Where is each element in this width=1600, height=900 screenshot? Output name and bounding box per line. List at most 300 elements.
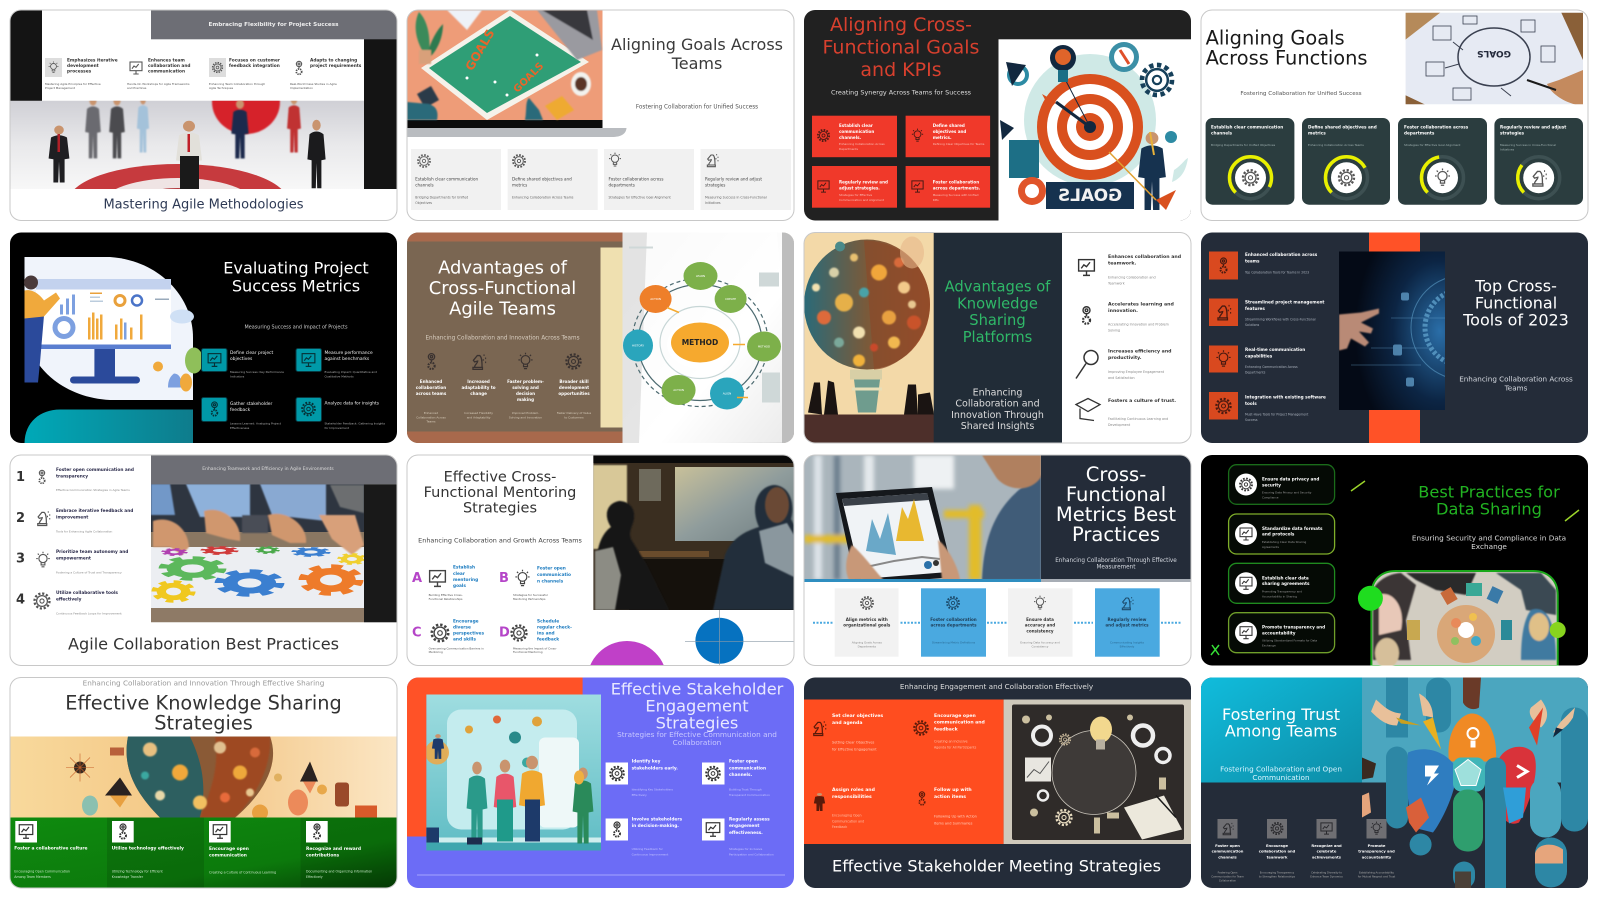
item: define objectives: objectives xyxy=(230,356,253,362)
item: follow up xyxy=(919,786,977,826)
item D: ins and xyxy=(537,630,555,636)
title: Strategies xyxy=(463,500,537,516)
item D: Measuring the Impact of Cross- xyxy=(513,646,557,650)
subtitle: Exchange xyxy=(1471,542,1507,550)
item: data privacy: Ensuring Data Privacy and Security xyxy=(1262,491,1312,495)
item B: n channels xyxy=(537,578,564,584)
title: Metrics Best xyxy=(1056,502,1176,526)
teal header block xyxy=(1201,678,1362,782)
item: increases efficiency: Improving Employee Engagement xyxy=(1108,370,1165,374)
column: reward contributions: Recognize and reward xyxy=(306,846,361,852)
item: promote transparency: Utilizing Standardized Formats for Data xyxy=(1262,639,1317,643)
item: benchmarks: Evaluating Impact: Quantitative and xyxy=(324,370,377,374)
panel: Cross-Functional Metrics Best Practices slide xyxy=(804,455,1191,666)
subtitle: Fostering Collaboration for Unified Success xyxy=(1240,91,1362,97)
numeral 4: 4 xyxy=(16,592,25,608)
item 3: Prioritize team autonomy and xyxy=(56,548,128,554)
title: Teams xyxy=(671,54,722,72)
card: define shared objectives: Define shared objectives and xyxy=(512,176,572,181)
title: Cross-Functional xyxy=(429,278,576,298)
item: open communication xyxy=(702,758,770,797)
item: identify stakeholders: Identifying Key Stakeholders xyxy=(632,788,673,792)
item 2: improvement xyxy=(56,514,88,520)
panel: Mastering Agile Methodologies slide xyxy=(10,10,396,212)
item: define objectives: Define clear project xyxy=(230,350,273,356)
item: fosters trust: Development xyxy=(1108,423,1131,427)
top subtitle: Enhancing Engagement and Collaboration Effectively xyxy=(900,682,1094,691)
photo: digital touch xyxy=(1339,252,1445,410)
item A: Functional Relationships xyxy=(429,597,463,601)
card: review gauge xyxy=(1494,118,1583,207)
item A: goals xyxy=(453,582,466,588)
item 2 xyxy=(38,508,133,534)
card: establish clear communication: channels xyxy=(415,182,434,187)
title: Tools of 2023 xyxy=(1462,310,1569,329)
title: Functional xyxy=(1475,293,1557,312)
item: assign roles: Encouraging Open xyxy=(832,814,862,818)
diagram: method cycle: HISTORY xyxy=(632,344,644,348)
subtitle: Communication xyxy=(1252,772,1310,782)
item: open communication: Foster open xyxy=(729,758,758,764)
band heading: Embracing Flexibility for Project Success xyxy=(209,22,339,28)
item: open communication: feedback xyxy=(934,726,959,732)
item: assign roles xyxy=(814,786,875,829)
card: align metrics: organizational goals xyxy=(843,622,891,627)
gray band xyxy=(151,455,397,484)
column: teamwork: teamwork xyxy=(1267,855,1288,859)
item 4 text: Adapts to changing xyxy=(310,57,357,63)
subtitle: Enhancing Collaboration and Growth Across Teams xyxy=(418,536,582,544)
subtitle: Strategies for Effective Communication and xyxy=(617,730,777,738)
title: Practices xyxy=(1072,522,1160,546)
card: communication gauge xyxy=(1206,118,1294,207)
card: shared objectives: metrics. xyxy=(933,134,952,140)
item: enhances collaboration: teamwork. xyxy=(1108,260,1136,266)
title: Mastering Agile Methodologies xyxy=(103,198,304,212)
card: foster collaboration xyxy=(906,166,990,208)
column: skill development: Faster Delivery of Value xyxy=(557,411,591,415)
column: skill development xyxy=(557,354,591,419)
card: objectives gauge: Enhancing Collaboration Across Teams xyxy=(1308,143,1364,147)
card: shared objectives: Defining Clear Objectives for Teams xyxy=(933,142,985,146)
card: ensure accuracy: Ensuring Data Accuracy and xyxy=(1020,640,1060,644)
card: objectives gauge: metrics xyxy=(1308,130,1326,135)
item: fosters trust xyxy=(1076,398,1176,427)
item: involve stakeholders: Involve stakeholders xyxy=(632,816,682,822)
item: benchmarks: Measure performance xyxy=(324,350,373,356)
card: establish clear communication: Bridging Departments for Unified xyxy=(415,196,468,200)
column: accountability: transparency and xyxy=(1358,850,1395,854)
card: foster collaboration: Measuring Success with Unified xyxy=(933,193,979,197)
connector dots xyxy=(813,622,1181,624)
item D xyxy=(499,618,572,654)
column: collaboration: collaboration xyxy=(416,384,446,390)
illustration: knowledge heart xyxy=(10,736,396,818)
title: Strategies xyxy=(154,711,253,734)
top accent strip xyxy=(407,232,622,242)
icon: gear xyxy=(209,58,226,77)
column: collaboration: Enhanced xyxy=(424,411,438,415)
title: Advantages of xyxy=(438,257,568,278)
diagram: method cycle: METHOD xyxy=(758,344,770,348)
item sub text row: Project Management xyxy=(45,86,76,90)
title: Aligning Goals Across xyxy=(611,34,783,54)
column: adaptability: and Adaptability xyxy=(467,415,491,419)
column: open communication: Encourage open xyxy=(209,846,249,852)
item C: and skills xyxy=(453,636,476,642)
item 4: Continuous Feedback Loops for Improvement xyxy=(56,611,122,615)
item: standardize formats: Agreements xyxy=(1262,545,1280,549)
illustration: hands and pills xyxy=(1362,678,1588,888)
card: review metrics xyxy=(1095,588,1160,657)
panel: Effective Stakeholder Engagement Strategies slide xyxy=(407,678,794,888)
item: open communication: Creating an Inclusive xyxy=(934,740,968,744)
item sub text row: Hands-On Workshops for Agile Frameworks xyxy=(127,82,190,86)
card: review strategies: Strategies for Effective xyxy=(839,193,872,197)
title: Success Metrics xyxy=(232,276,360,295)
orange strip bottom xyxy=(1369,410,1420,443)
black right block xyxy=(364,484,397,622)
card: align metrics: Align metrics with xyxy=(846,616,888,622)
column: collaborative culture: Foster a collaborative culture xyxy=(14,846,87,852)
item 4 xyxy=(34,590,122,615)
card: review metrics: Communicating Insights xyxy=(1110,640,1145,644)
item: integration: Success xyxy=(1245,418,1258,422)
panel: Effective Knowledge Sharing Strategies slide xyxy=(10,678,398,888)
card: regularly review xyxy=(700,149,791,210)
black right bar xyxy=(364,39,397,189)
item: promote transparency xyxy=(1229,613,1335,653)
column: achievements: celebrate xyxy=(1317,850,1337,854)
item: stakeholder feedback: Gather stakeholder xyxy=(230,400,272,406)
icon: strategy xyxy=(296,61,302,74)
item: streamlined project management: features xyxy=(1245,306,1265,310)
subtitle: Enhancing Collaboration Across xyxy=(1459,374,1573,383)
item A: mentoring xyxy=(453,576,478,582)
item 2 text: communication xyxy=(148,68,185,74)
item B: B xyxy=(499,571,509,586)
panel: Advantages of Knowledge Sharing Platforms slide xyxy=(804,232,1191,444)
decor: blue circle xyxy=(695,618,743,664)
card: shared objectives: objectives and xyxy=(933,128,966,134)
card: communication gauge: Bridging Departments for Unified Objectives xyxy=(1211,143,1276,147)
item: accelerates learning: innovation. xyxy=(1108,308,1138,314)
item: open communication: Encourage open xyxy=(934,712,976,718)
column: problem solving: Faster problem- xyxy=(507,378,544,384)
item B: communicatio xyxy=(537,571,571,577)
card: review strategies xyxy=(812,166,897,208)
item 3 text: feedback integration xyxy=(229,63,280,69)
item: sharing agreements xyxy=(1229,563,1335,603)
card: review strategies: adjust strategies. xyxy=(839,185,880,190)
column: achievements: achievements xyxy=(1312,855,1342,859)
bottom accent strip xyxy=(407,432,622,444)
card: define shared objectives: Enhancing Collaboration Across Teams xyxy=(512,196,574,200)
column: accountability: Promote xyxy=(1368,844,1386,848)
diagram: method cycle: ACTION xyxy=(673,388,684,392)
item: clear objectives: for Effective Engagement xyxy=(832,748,877,752)
column: collaboration: across teams xyxy=(416,390,447,396)
item: assess engagement: Strategies for Inclusive xyxy=(729,847,763,851)
diagram: method cycle: METHOD xyxy=(682,338,718,347)
column: adaptability: Increased Flexibility xyxy=(464,411,493,415)
column: open channels: Foster open xyxy=(1215,844,1240,848)
column: teamwork: Encouraging Transparency xyxy=(1260,870,1295,874)
column: achievements: Celebrating Diversity to xyxy=(1311,870,1342,874)
column: collaborative culture: Encouraging Open Communication xyxy=(14,870,70,874)
card: regularly review: Initiatives xyxy=(705,201,721,205)
card: foster collaboration: across departments xyxy=(930,622,977,627)
item: data privacy xyxy=(1229,465,1335,504)
card: foster collaboration: Foster collaboration across xyxy=(608,176,664,181)
subtitle: Collaboration and xyxy=(955,398,1040,409)
item: assess engagement: effectiveness. xyxy=(729,829,763,835)
item A: Building Effective Cross- xyxy=(429,593,463,597)
item: open communication: channels. xyxy=(729,772,753,778)
column: open channels: channels xyxy=(1218,855,1238,859)
item: analyze data: Stakeholder Feedback: Gathering Insights xyxy=(324,422,385,426)
title: Sharing xyxy=(969,312,1026,329)
item A: Establish xyxy=(453,564,475,570)
item: enhanced collaboration: teams xyxy=(1245,258,1260,263)
column: adaptability: adaptability to xyxy=(462,384,496,390)
item: enhanced collaboration xyxy=(1209,252,1318,280)
item A: clear xyxy=(453,570,466,576)
subtitle: Teams xyxy=(1504,383,1528,392)
card: foster collaboration: Strategies for Effective Goal Alignment xyxy=(608,196,671,200)
image: laptop with goals field: GOALS xyxy=(463,27,497,73)
title: Best Practices for xyxy=(1418,482,1560,501)
black left bar xyxy=(10,10,42,101)
item: assess engagement xyxy=(702,816,774,856)
card: ensure accuracy: consistency xyxy=(1026,628,1054,633)
item C xyxy=(412,618,484,654)
photo: hand sketching goals xyxy=(1406,12,1583,104)
item: follow up: Items and Summaries xyxy=(934,822,973,826)
card: ensure accuracy: Ensure data xyxy=(1026,616,1054,622)
item A xyxy=(412,564,478,601)
item: assess engagement: Regularly assess xyxy=(729,816,770,822)
item 2: Embrace iterative feedback and xyxy=(56,508,133,514)
photo: figurines on target xyxy=(10,100,364,189)
image: laptop with goals field: GOALS xyxy=(512,61,546,95)
card: communication channels: Departments xyxy=(839,147,858,151)
title: Top Cross- xyxy=(1474,276,1557,295)
column: teamwork: Encourage xyxy=(1266,844,1288,848)
card: align metrics xyxy=(835,588,898,657)
title: Cross- xyxy=(1086,462,1146,486)
card: communication channels: communication xyxy=(839,128,874,134)
item B: Strategies for Successful xyxy=(513,593,548,597)
column: collaboration: Teams xyxy=(425,420,436,424)
item: accelerates learning: Accelerates learning and xyxy=(1108,301,1174,307)
item sub text row: Mastering Agile Principles for Effective xyxy=(45,82,101,86)
card: ensure accuracy: Consistency xyxy=(1032,645,1049,649)
title: Platforms xyxy=(963,328,1032,345)
item: open communication: Building Trust Through xyxy=(729,788,762,792)
illustration: handshake team xyxy=(426,694,601,850)
card: foster collaboration xyxy=(604,149,694,210)
panel: Aligning Cross-Functional Goals and KPIs slide xyxy=(804,10,1192,221)
card: establish clear communication: Establish clear communication xyxy=(415,176,478,181)
item: open communication: Transparent Communication xyxy=(728,793,770,797)
card: regularly review: Regularly review and adjust xyxy=(705,176,762,181)
photo: team around table xyxy=(1371,571,1558,668)
card: review gauge: Measuring Success in Cross-Functional xyxy=(1500,143,1556,147)
icon: people xyxy=(130,62,142,74)
title: Agile Collaboration Best Practices xyxy=(68,634,339,654)
column: teamwork xyxy=(1259,819,1296,878)
item B: Mentoring Partnerships xyxy=(513,597,546,601)
decor: green circle xyxy=(1358,586,1383,611)
illustration: dashboard monitor xyxy=(24,257,203,400)
card: communication channels: Enhancing Collaboration Across xyxy=(839,142,885,146)
photo: tablet with charts xyxy=(804,456,1041,579)
item: stakeholder feedback: feedback xyxy=(230,406,251,412)
column: open channels xyxy=(1211,819,1244,882)
column: skill development: to Customers xyxy=(564,415,584,419)
item: define objectives xyxy=(202,348,284,378)
item: assess engagement: Participation and Collaboration xyxy=(729,852,774,856)
item: assign roles: Assign roles and xyxy=(832,786,875,792)
item sub text row: Real-World Case Studies in Agile xyxy=(290,82,337,86)
item: streamlined project management: Streamlined project management xyxy=(1245,299,1324,304)
item: sharing agreements: Establish clear data xyxy=(1262,575,1309,580)
card: review metrics: Effectively xyxy=(1120,645,1135,649)
item: analyze data: for Improvement xyxy=(324,426,350,430)
item: real-time communication: Real-time communication xyxy=(1245,346,1305,352)
card: review strategies: Regularly review and xyxy=(839,179,888,184)
item sub text row: and Practices xyxy=(127,86,147,90)
image: tools flat lay xyxy=(1004,700,1191,844)
card: foster collaboration: KPIs xyxy=(933,198,939,202)
item 3 text: Focuses on customer xyxy=(229,57,281,63)
title: Aligning Goals xyxy=(1206,26,1345,49)
card: foster collaboration xyxy=(921,588,986,657)
item sub text row: Agile Techniques xyxy=(209,86,234,90)
card: align metrics: Departments xyxy=(858,645,877,649)
subtitle: Fostering Collaboration and Open xyxy=(1220,764,1342,773)
card: review metrics: and adjust metrics xyxy=(1105,622,1149,627)
title: Among Teams xyxy=(1225,721,1337,740)
item: data privacy: Compliance xyxy=(1262,496,1279,500)
item: identify stakeholders: Effectively xyxy=(632,793,647,797)
item B: Foster open xyxy=(537,565,566,571)
panel: Best Practices for Data Sharing slide xyxy=(1201,455,1588,668)
column: collaboration xyxy=(416,354,447,424)
orange panel xyxy=(804,700,1004,844)
item: involve stakeholders: Utilizing Feedback for xyxy=(632,847,664,851)
navy center panel xyxy=(934,232,1062,444)
item: real-time communication: Departments xyxy=(1245,370,1266,374)
item 1 text: Emphasizes iterative xyxy=(67,57,118,63)
card: review gauge: strategies xyxy=(1500,130,1524,135)
title: Across Functions xyxy=(1206,46,1368,69)
subtitle: Enhancing Collaboration and Innovation Across Teams xyxy=(425,336,580,342)
card: foster collaboration: Foster collaboration xyxy=(930,616,977,622)
column: accountability xyxy=(1358,819,1395,878)
subtitle: Enhancing Collaboration Through Effective xyxy=(1055,558,1177,564)
card: foster collaboration: departments xyxy=(608,182,635,187)
item: involve stakeholders: Continuous Improvement xyxy=(632,852,669,856)
image: target with arrows: GOALS xyxy=(1058,186,1122,206)
subtitle: Enhancing Collaboration and Innovation Through Effective Sharing xyxy=(83,678,324,688)
item: open communication: communication xyxy=(729,765,766,771)
item 1 text: processes xyxy=(67,68,92,74)
illustration: knowledge bulb xyxy=(804,233,934,442)
column: teamwork: to Strengthen Relationships xyxy=(1259,874,1296,878)
item: promote transparency: accountability xyxy=(1262,630,1296,635)
card: review strategies: Communication and Alignment xyxy=(839,198,885,202)
panel: Advantages of Cross-Functional Agile Teams slide xyxy=(407,232,794,444)
item: enhances collaboration: Enhancing Collaboration and xyxy=(1108,276,1156,280)
title: Data Sharing xyxy=(1436,499,1542,518)
card: communication channels xyxy=(812,116,897,157)
item: integration: Must-Have Tools for Project Management xyxy=(1245,412,1309,416)
column: adaptability: change xyxy=(470,390,487,396)
item B xyxy=(499,565,571,601)
column: problem solving: Solving and Innovation xyxy=(509,415,542,419)
item: accelerates learning: Accelerating Innovation and Problem xyxy=(1108,322,1169,326)
subtitle: Enhancing xyxy=(973,387,1022,398)
image: laptop with goals field xyxy=(407,10,602,128)
item D: D xyxy=(499,626,510,640)
numeral 3: 3 xyxy=(16,552,25,566)
column: collaboration: Enhanced xyxy=(420,378,442,384)
card: collaboration gauge: Foster collaboration across xyxy=(1404,124,1469,129)
item: standardize formats: and protocols xyxy=(1262,531,1295,536)
subtitle: Creating Synergy Across Teams for Success xyxy=(831,89,972,97)
item: benchmarks: Qualitative Methods xyxy=(324,374,354,378)
item A: A xyxy=(412,571,422,586)
title: Engagement xyxy=(645,696,749,715)
icon: bulb xyxy=(45,58,62,77)
card: communication channels: Establish clear xyxy=(839,122,873,128)
item: enhanced collaboration: Enhanced collaboration across xyxy=(1245,252,1318,256)
item: identify stakeholders: stakeholders early. xyxy=(632,765,678,771)
decor: purple semicircle xyxy=(587,641,667,721)
column: technology: Utilize technology effectively xyxy=(112,846,184,852)
divider stripe xyxy=(804,579,1191,582)
item: identify stakeholders xyxy=(606,758,678,797)
decor: lime circle xyxy=(1550,622,1566,638)
column: problem solving: making xyxy=(517,396,534,402)
title: Evaluating Project xyxy=(223,258,369,277)
card: foster collaboration: Foster collaboration xyxy=(933,179,979,184)
item: fosters trust: Fosters a culture of trust. xyxy=(1108,398,1176,404)
item: standardize formats xyxy=(1229,514,1335,554)
column: achievements: Enhance Team Dynamics xyxy=(1310,874,1343,878)
item: fosters trust: Facilitating Continuous Learning and xyxy=(1108,417,1168,421)
panel: Effective Cross-Functional Mentoring Strategies slide xyxy=(407,455,795,721)
title: Effective Stakeholder Meeting Strategies xyxy=(832,856,1161,876)
item: assign roles: Feedback xyxy=(832,825,847,829)
subtitle: Measurement xyxy=(1096,565,1136,571)
item C: C xyxy=(412,626,422,640)
card: communication gauge: Establish clear communication xyxy=(1211,124,1283,129)
item: clear objectives: Setting Clear Objectives xyxy=(832,740,875,744)
item: standardize formats: Standardize data formats xyxy=(1262,526,1323,530)
column: open channels: communication xyxy=(1212,850,1244,854)
numeral 2: 2 xyxy=(16,511,25,526)
card: review gauge: Regularly review and adjust xyxy=(1500,124,1566,129)
item: open communication xyxy=(914,712,985,750)
item: define objectives: Measuring Success: Key Performance xyxy=(230,370,284,374)
column: open communication: communication xyxy=(209,852,247,858)
card: ensure accuracy: accuracy and xyxy=(1025,622,1055,627)
item: integration: Integration with existing software xyxy=(1245,394,1326,399)
item: streamlined project management: Solutions xyxy=(1245,323,1260,327)
